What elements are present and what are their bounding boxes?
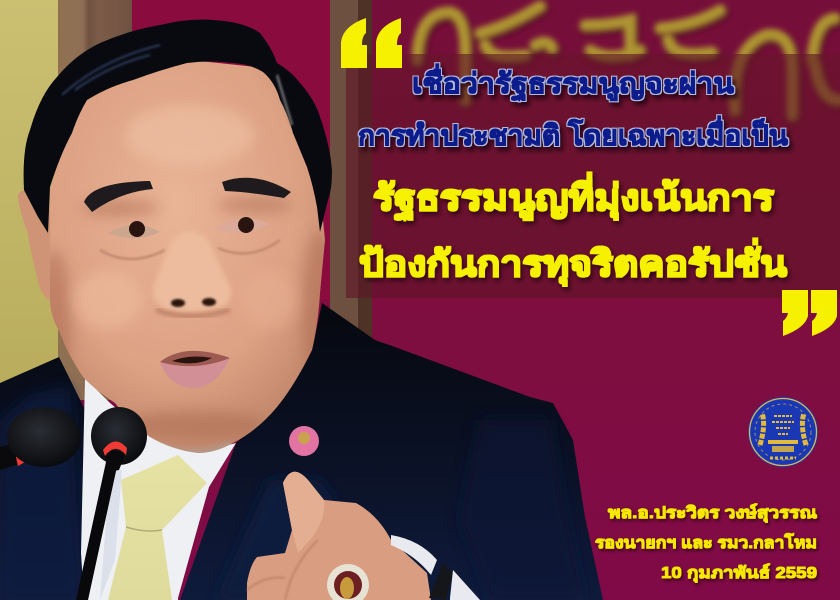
lapel pin [289, 426, 319, 456]
shirt and collar [81, 378, 236, 600]
cheek and jaw shading [39, 197, 338, 439]
quote line 1: เชื่อว่ารัฐธรรมนูญจะผ่าน [412, 63, 734, 102]
ear [18, 190, 50, 300]
face [50, 62, 325, 453]
eyes [100, 217, 280, 259]
blurred gold sign in background [417, 6, 840, 118]
emblem seal [748, 397, 818, 467]
forehead highlight [125, 105, 255, 165]
shirt cuff and watch [391, 535, 480, 600]
quote line 4: ป้องกันการทุจริตคอรัปชั่น [359, 238, 787, 287]
eyebrows [84, 178, 291, 212]
closing quotation mark [782, 290, 837, 336]
suit jacket [0, 303, 603, 600]
signature line 2: position: รองนายกฯ และ รมว.กลาโหม [595, 532, 817, 552]
quote line 3: รัฐธรรมนูญที่มุ่งเน้นการ [373, 172, 775, 221]
opening quotation mark [341, 18, 402, 68]
microphone left [0, 407, 81, 470]
pointing hand [247, 472, 431, 600]
hair [24, 20, 332, 233]
ring [327, 564, 369, 600]
mouth [160, 351, 230, 388]
dark translucent quote panel [346, 54, 840, 298]
signature line 3: date: 10 กุมภาพันธ์ 2559 [661, 563, 817, 583]
quote line 2: การทำประชามติ โดยเฉพาะเมื่อเป็น [358, 115, 788, 151]
necktie [108, 455, 207, 600]
nose [153, 231, 231, 316]
microphone right with stem [76, 407, 147, 600]
signature line 1: name: พล.อ.ประวิตร วงษ์สุวรรณ [608, 503, 817, 523]
